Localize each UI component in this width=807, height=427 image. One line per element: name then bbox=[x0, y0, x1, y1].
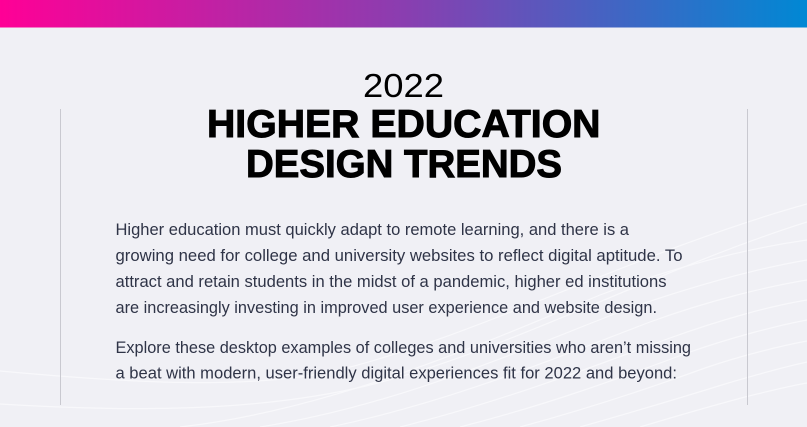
top gradient bar bbox=[0, 0, 807, 28]
title bbox=[207, 67, 600, 186]
title line two: DESIGN TRENDS bbox=[246, 143, 562, 186]
title year: 2022 bbox=[363, 67, 444, 104]
title line one: HIGHER EDUCATION bbox=[207, 103, 600, 146]
intro paragraph bbox=[116, 221, 682, 317]
right vertical rule bbox=[747, 109, 748, 405]
left vertical rule bbox=[60, 109, 61, 405]
intro paragraph: Higher education must quickly adapt to remote learning, and there is a bbox=[116, 221, 630, 239]
explore paragraph: Explore these desktop examples of colleges and universities who aren’t missing bbox=[116, 339, 691, 357]
intro paragraph: growing need for college and university websites to reflect digital aptitude. To bbox=[116, 247, 682, 265]
explore paragraph bbox=[116, 339, 691, 382]
intro paragraph: are increasingly investing in improved user experience and website design. bbox=[116, 299, 657, 317]
explore paragraph: a beat with modern, user-friendly digital experiences fit for 2022 and beyond: bbox=[116, 364, 677, 382]
intro paragraph: attract and retain students in the midst of a pandemic, higher ed institutions bbox=[116, 273, 666, 291]
